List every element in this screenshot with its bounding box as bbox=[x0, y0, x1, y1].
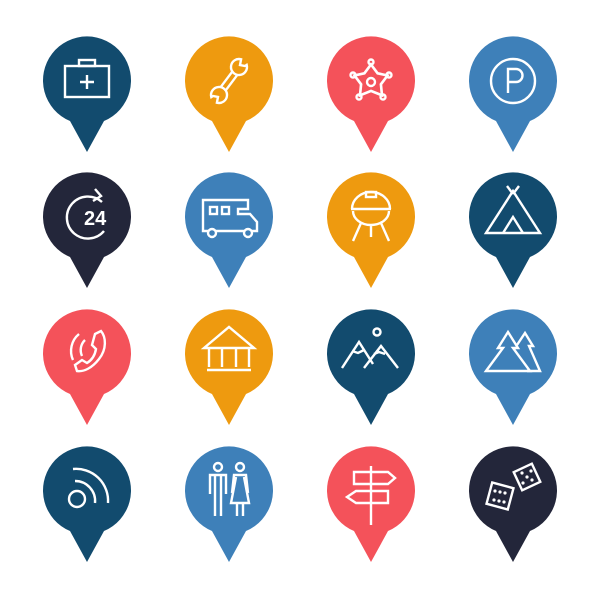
pin: sheriff star bbox=[327, 36, 415, 152]
pin: restroom bbox=[185, 446, 273, 562]
pin: trees bbox=[469, 309, 557, 425]
pin: dice bbox=[469, 446, 557, 562]
pin: parking bbox=[469, 36, 557, 152]
pin: mountains bbox=[327, 309, 415, 425]
pin: museum bbox=[185, 309, 273, 425]
pin: wrench bbox=[185, 36, 273, 152]
pin: barbecue grill bbox=[327, 172, 415, 288]
pin: wifi signal bbox=[43, 446, 131, 562]
pin: 24 hours bbox=[43, 172, 131, 288]
pin: first aid bbox=[43, 36, 131, 152]
pin: tent bbox=[469, 172, 557, 288]
pin: camper van bbox=[185, 172, 273, 288]
pin: phone bbox=[43, 309, 131, 425]
pin: signpost bbox=[327, 446, 415, 562]
pin: 24 hours: 24 bbox=[84, 208, 107, 230]
